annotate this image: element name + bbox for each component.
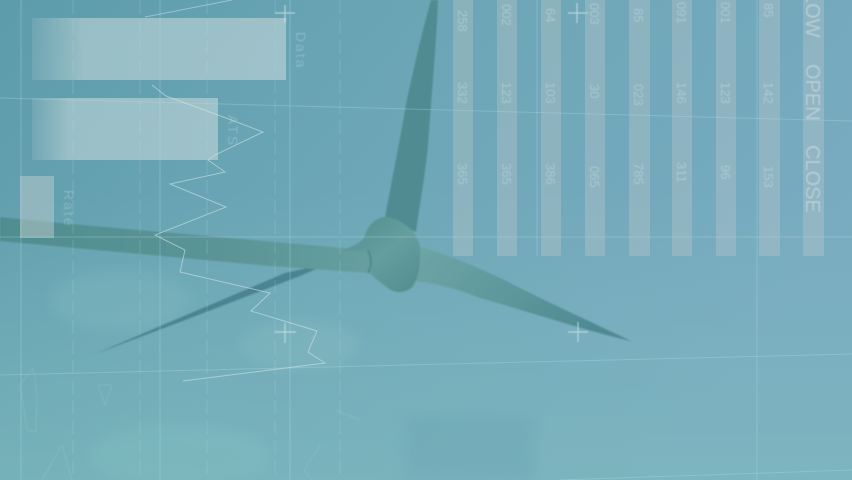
column values: 64 bbox=[543, 8, 558, 22]
column values: 365 bbox=[455, 163, 470, 185]
bar chart bbox=[20, 18, 286, 238]
crosshair markers bbox=[275, 3, 588, 343]
data columns bbox=[453, 0, 824, 256]
column values: 85 bbox=[631, 8, 646, 22]
left blade bbox=[0, 217, 369, 273]
column values: 311 bbox=[674, 162, 689, 183]
column values: 123 bbox=[718, 82, 733, 104]
side labels: ATS bbox=[225, 115, 241, 147]
column headings: CLOSE bbox=[801, 145, 823, 213]
column values: 258 bbox=[455, 10, 470, 32]
column values: 365 bbox=[499, 163, 514, 185]
line chart continuation bbox=[152, 85, 325, 381]
right blade bbox=[416, 246, 631, 341]
column values: 30 bbox=[587, 84, 602, 98]
column headings bbox=[801, 0, 823, 213]
column values: 091 bbox=[674, 2, 689, 24]
column values: 785 bbox=[631, 163, 646, 185]
side labels bbox=[61, 32, 309, 228]
column values: 001 bbox=[718, 2, 733, 24]
side labels: Data bbox=[293, 32, 309, 70]
column values: 003 bbox=[587, 3, 602, 25]
upper blade bbox=[385, 0, 438, 232]
column values: 023 bbox=[631, 84, 646, 106]
lower left blade bbox=[95, 263, 330, 354]
column values: 85 bbox=[761, 3, 776, 17]
column values bbox=[455, 2, 776, 188]
hub collar bbox=[368, 250, 371, 273]
column values: 123 bbox=[499, 82, 514, 104]
faint map sketches bbox=[20, 368, 360, 480]
column values: 332 bbox=[455, 82, 470, 104]
column values: 146 bbox=[674, 82, 689, 104]
column values: 142 bbox=[761, 82, 776, 104]
column values: 153 bbox=[761, 166, 776, 188]
hub bbox=[343, 217, 420, 292]
column values: 002 bbox=[499, 4, 514, 26]
turbine bbox=[0, 0, 631, 354]
column values: 065 bbox=[587, 166, 602, 188]
column values: 103 bbox=[543, 82, 558, 104]
side labels: Rate bbox=[61, 190, 77, 228]
line chart bbox=[145, 0, 232, 17]
column values: 96 bbox=[718, 165, 733, 179]
column values: 386 bbox=[543, 163, 558, 185]
column headings: OPEN bbox=[801, 64, 823, 121]
